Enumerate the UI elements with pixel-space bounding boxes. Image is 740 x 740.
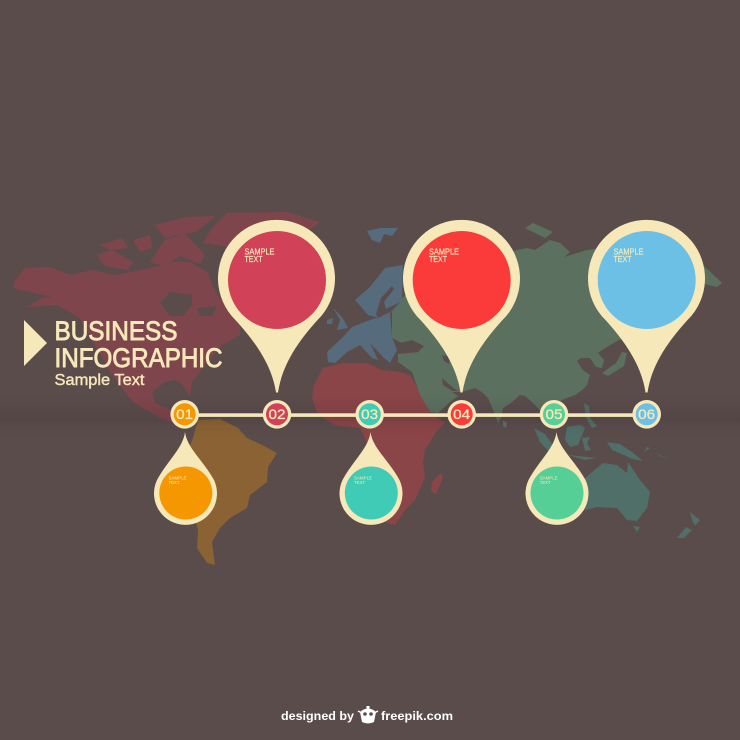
title: Business Infographic: INFOGRAPHIC [54,343,222,373]
icon: freepik logo [358,706,378,724]
node 06 [632,400,661,429]
node 01: 01 [176,406,193,422]
pin 3: blue [588,220,705,392]
map: Africa [312,363,445,525]
map: St Lawrence [197,306,217,316]
pin 3: blue: SAMPLE [614,248,644,256]
credit: designed by freepik.com: freepik.com [381,709,453,723]
node 04: 04 [453,406,470,422]
drop 2: teal: SAMPLE [354,476,372,481]
map: Black Sea [400,340,424,352]
pin 2: red [403,220,520,392]
drop 2: teal [340,432,403,525]
title arrow [24,320,47,366]
subtitle: Sample Text [54,372,145,389]
map: North America [13,212,320,426]
node 03: 03 [361,406,378,422]
map: Oceania and Southeast Asia islands [534,403,700,538]
world map [13,212,722,565]
node 01 [170,400,199,429]
drop 3: green: TEXT [540,480,551,485]
drop 1: orange: SAMPLE [168,476,186,481]
pin 1: crimson [218,220,335,392]
timeline line [185,413,647,417]
pin 1: crimson: TEXT [244,255,263,264]
map: Persian Gulf [442,378,458,391]
map: South America [180,419,277,565]
map: Europe [327,228,403,363]
node 06: 06 [638,406,655,422]
credit: designed by freepik.com: designed by [281,709,354,723]
title: Business Infographic [54,316,222,373]
node 02 [263,400,291,429]
map: Madagascar [431,473,443,494]
drop 3: green: SAMPLE [540,476,558,481]
title: Business Infographic: BUSINESS [54,316,178,346]
drop 1: orange: TEXT [168,480,180,485]
pin 3: blue: TEXT [614,255,632,264]
node 05: 05 [546,406,563,422]
node 05 [540,400,568,429]
pin 2: red: TEXT [429,255,447,264]
pin 1: crimson: SAMPLE [244,248,274,256]
map: Baltic Sea [376,286,400,318]
credit: designed by freepik.com [281,706,453,724]
shadow band [0,395,740,440]
drop 1: orange [154,432,217,525]
map: Caspian Sea [442,355,450,364]
node 04 [447,400,476,429]
drop 2: teal: TEXT [354,480,365,485]
pin 2: red: SAMPLE [429,248,459,256]
drop 3: green [526,432,589,525]
node 03 [355,400,384,429]
map: Asia [392,223,722,428]
map: Hudson Bay [160,292,192,316]
node 02: 02 [268,406,286,422]
